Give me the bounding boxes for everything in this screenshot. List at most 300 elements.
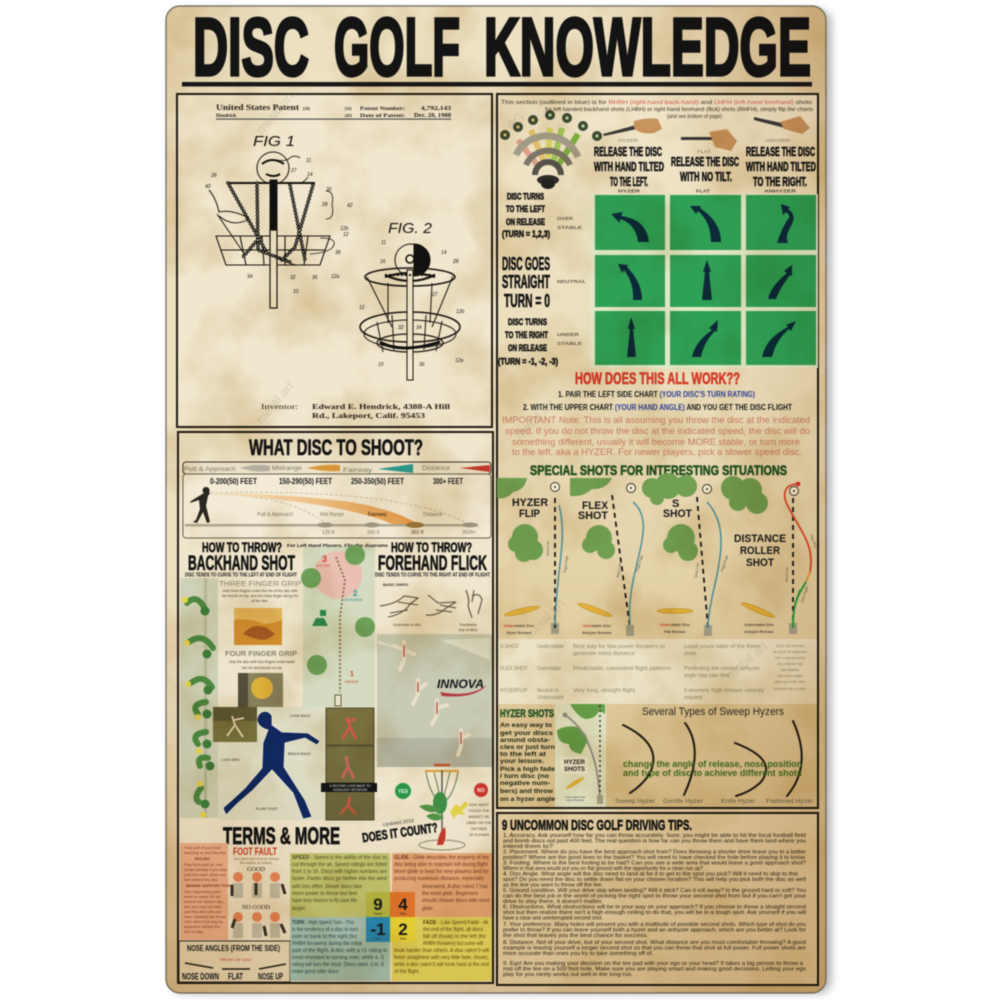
path labels: Shot Line xyxy=(785,567,789,582)
flight distance chart: Mid Range xyxy=(320,512,344,518)
flat release text: FLAT xyxy=(697,149,711,154)
shot comparison table: S-SHOT xyxy=(500,644,519,650)
glide card: GLIDE - Glide describes the property of the xyxy=(394,855,489,861)
dashed note: OUTSIDE xyxy=(471,827,488,831)
dashed note: BASKET OR xyxy=(469,815,490,819)
path labels: Flight Path xyxy=(563,556,569,573)
figure 1 basket: 40 xyxy=(205,184,211,190)
captions: Anhyzer Release xyxy=(744,630,774,634)
important note: IMPORTANT Note: This is all assuming you throw the disc at the indicated xyxy=(502,415,810,426)
flight number boxes: Turn xyxy=(375,936,381,940)
glide card: the most glide. Beginners xyxy=(422,891,478,897)
icon: turn gauge xyxy=(500,110,602,189)
shot comparison table: Overstable xyxy=(537,666,561,672)
foot fault rules: NO GOOD xyxy=(242,905,271,911)
left turn labels: DISC TURNS xyxy=(508,317,547,328)
heading: backhand shot: DISC TENDS TO CURVE TO THE LEFT AT END OF FLIGHT xyxy=(185,572,297,578)
shot names: ROLLER xyxy=(740,545,780,557)
tips list: 6. Obstructions. What obstructions will be in your way on your approach? If you choose to throw a straight second xyxy=(503,904,806,910)
tips list: mid off the tee on a 500 foot hole. Make sure you are playing smart and making good decisions. Letting your ego xyxy=(503,966,806,972)
foot fault rules: RULING xyxy=(195,856,210,861)
figure 2 basket: 32 xyxy=(398,325,404,331)
shot comparison table: Perfecting the correct anhyzer xyxy=(684,666,760,672)
shot names: SHOT xyxy=(578,510,608,522)
forehand grip drawings: Thumbside xyxy=(459,623,477,627)
figure 1 basket: 28 xyxy=(321,202,328,208)
hyzer shots section: HYZER SHOTS xyxy=(500,708,554,720)
flight distance chart: Distance xyxy=(423,512,443,518)
speed card: have less chance to fly past the xyxy=(292,898,357,904)
dashed note: OF A CHAIN xyxy=(469,833,489,837)
swing photos: A SECOND LOOK BACK TO xyxy=(330,784,371,788)
flight distance chart: 250-350(50) FEET xyxy=(351,476,405,486)
figure 2 basket: 34 xyxy=(416,325,422,331)
hyzer map xyxy=(555,704,606,807)
figure 2 basket: 16 xyxy=(380,259,386,265)
shot comparison table: Least yours faller of the three xyxy=(684,644,760,650)
glide card: should choose discs with more xyxy=(422,898,490,904)
speed card: faster. Faster discs go farther into the wind xyxy=(292,876,387,882)
foot fault rules: anywhere behind the xyxy=(184,924,220,929)
path labels xyxy=(546,534,818,603)
shot comparison table: are good for beginners xyxy=(773,650,807,654)
heading: does it count: DOES IT COUNT? xyxy=(361,820,439,845)
inventor text: Rd., Lakeport, Calif. 95453 xyxy=(312,412,426,420)
left turn labels: UNDER xyxy=(557,332,580,338)
left turn labels: ON RELEASE xyxy=(508,343,547,354)
tips list: as the line you want to throw off the tee. xyxy=(503,882,603,888)
figure 1 basket: 32 xyxy=(290,275,296,281)
flat release text xyxy=(671,149,739,184)
figure 1 basket xyxy=(205,133,353,308)
shot names: FLEX xyxy=(582,500,609,512)
flight distance chart: 350 ft xyxy=(411,530,424,536)
figure 2 basket: 14 xyxy=(441,250,447,256)
note: left hand players: For Left Hand Players, Flip the diagrams xyxy=(287,543,388,549)
turn card: is the tendency of a disc to turn xyxy=(292,927,358,933)
tips list: 2. Placement. Where do you have the best approach shot from? Does throwing a shorter drive leave you in a better xyxy=(503,850,806,856)
how does this all work: HOW DOES THIS ALL WORK?? xyxy=(575,369,740,388)
left turn labels: TURN = 0 xyxy=(504,291,550,311)
how does this all work: 1. PAIR THE LEFT SIDE CHART (YOUR DISC'S TURN RATING) xyxy=(558,390,755,399)
flight distance chart: 350ft+ xyxy=(462,530,476,536)
foot fault rules: Your other foot may be xyxy=(184,919,223,924)
heading: backhand shot: HOW TO THROW? xyxy=(202,539,282,555)
throwing silhouette xyxy=(213,707,326,820)
figure 2 basket: 11 xyxy=(381,240,386,246)
tips list: example is leaving yourself a longer second shot so that you can throw that shot at full power. Full power shots are xyxy=(503,946,806,952)
throwing silhouette: LOCK HIPS xyxy=(221,758,240,762)
fade card: the end of the flight, all discs xyxy=(423,927,483,933)
foot fault rules: line of play. xyxy=(184,929,203,934)
turn card: RHBH throwers) during the initial xyxy=(292,941,362,947)
grip guide: of the disc. xyxy=(251,599,269,603)
watermark text: metal art xyxy=(522,595,568,642)
captions: Overstable Disc xyxy=(583,624,611,628)
flight distance chart: Putt & Approach xyxy=(257,512,293,518)
foot fault rules: FOOT FAULT xyxy=(233,846,277,858)
figure 2 basket: 10 xyxy=(378,362,384,368)
left turn labels: STABLE xyxy=(557,341,583,347)
nose angles: FRONT OF DISC xyxy=(220,957,252,962)
path labels: Flight Path xyxy=(635,555,644,572)
sign background xyxy=(166,6,832,994)
patent header: Date of Patent: xyxy=(360,113,405,119)
shot names: HYZER xyxy=(512,497,548,509)
sweep hyzer types: Flattened Hyzer xyxy=(766,798,814,805)
figure 1 basket: 30 xyxy=(326,187,332,193)
sweep hyzer types: Knife Hyzer xyxy=(721,798,756,805)
shot comparison table: Predictable, consistent flight patterns xyxy=(573,666,672,672)
foot fault rules: *Any part of your foot xyxy=(184,845,221,850)
hyzer release text: TO THE LEFT. xyxy=(610,174,648,189)
flight number boxes: 2 xyxy=(398,920,408,939)
course map: PUTTER xyxy=(316,564,330,568)
important note xyxy=(502,415,810,458)
shot comparison table: FLEX SHOT xyxy=(500,666,528,672)
flight distance chart xyxy=(183,474,491,538)
tips list: 8. Distance. Not of your drive, but of your second shot. What distance are you most comfortable throwing? A good xyxy=(503,940,806,946)
tips list: 3. Footing. Where is the best footing to be had? Can you see a wide area that would leave a good approach shot? xyxy=(503,860,806,866)
hyzer map: HYZER xyxy=(564,759,585,766)
shot comparison table: disc stability xyxy=(781,668,799,672)
grip guide: FOUR FINGER GRIP xyxy=(225,649,297,658)
left turn labels: STABLE xyxy=(557,225,583,231)
flight paths xyxy=(555,502,721,628)
throwing silhouette: PLANT FOOT xyxy=(256,807,279,811)
dashed note: DISC MUST xyxy=(469,803,490,807)
hyzer release text: HYZER xyxy=(618,138,639,143)
left turn labels: NEUTRAL xyxy=(557,279,586,285)
panel: hand angle chart xyxy=(497,94,818,808)
speed card: more power to throw but feel xyxy=(292,891,357,897)
anhyzer release text xyxy=(746,138,816,189)
captions: Hyzer Release xyxy=(506,631,532,635)
how does this all work xyxy=(523,369,792,412)
watermark text: metal art xyxy=(253,378,297,427)
important note: something different, usually it will become MORE stable, or turn more xyxy=(512,437,800,448)
flight number boxes: -1 xyxy=(370,920,386,939)
intro note: (and see bottom of page) xyxy=(667,114,722,120)
left turn labels: DISC TURNS xyxy=(507,192,544,202)
grip guide: THREE FINGER GRIP xyxy=(219,579,301,588)
tips list: have a clear and uninterrupted second shot. xyxy=(503,916,603,922)
throwing silhouette: REACH BACK xyxy=(288,752,311,756)
inventor text: Edward E. Hendrick, 4388-A Hill xyxy=(312,403,450,411)
figure 1 basket: 11 xyxy=(306,158,311,164)
icon: no: NO xyxy=(477,788,485,794)
tips list xyxy=(503,833,807,978)
glide card: disc being able to maintain loft during flight. xyxy=(394,862,489,868)
patent header: United States Patent xyxy=(216,102,299,112)
course map: 1 xyxy=(350,671,354,678)
foot fault rules: BEHIND SUPPORT POINT xyxy=(186,883,234,888)
sweep hyzer types: and type of disc to achieve different shots xyxy=(623,768,802,778)
hyzer release text: WITH HAND TILTED xyxy=(594,159,664,174)
inventor text xyxy=(261,403,450,420)
flight number boxes xyxy=(366,892,415,942)
hyzer map: SHOTS xyxy=(564,766,586,773)
captions: Understable Disc xyxy=(660,623,690,627)
hyzer map: Hyzer Release xyxy=(566,798,585,802)
left turn labels: OVER xyxy=(557,216,574,222)
patent header: Patent Number: xyxy=(360,106,405,112)
fade card: FADE - Low Speed Fade - At xyxy=(423,920,489,926)
heading: backhand shot: BACKHAND SHOT xyxy=(188,552,295,575)
innova logo: INNOVA xyxy=(437,677,484,691)
shot comparison table: Understable xyxy=(537,644,564,650)
fade card: finish straightest with very little fade, (hook), xyxy=(394,955,489,961)
tips list: 4. Disc Angle. What angle will the disc need to land at for it to get to the spot you pick? Will it need to skip to this xyxy=(503,872,798,878)
course map: 3 xyxy=(322,554,327,564)
left turn labels: STRAIGHT xyxy=(502,272,550,292)
watermark text: metal art xyxy=(722,638,771,682)
tips list: 7. Your preference. Many holes will present you with a multitude of possible second shots. Which type of shot do you xyxy=(503,922,806,928)
shot comparison table xyxy=(498,639,817,704)
left turn labels: (TURN = 1,2,3) xyxy=(502,229,550,240)
hyzer shots section xyxy=(500,704,814,807)
sweep hyzer types: Gentle Hyzer xyxy=(663,798,704,805)
captions: Flat Release xyxy=(664,630,686,634)
turn card: part of the flight. A disc with a +1 rating is xyxy=(292,948,388,954)
hyzer shots section: Pick a high fade xyxy=(500,766,555,773)
glide card: downwind. A disc rated 7 has xyxy=(422,884,488,890)
foot fault rules: have released the throw. xyxy=(184,914,226,919)
figure 1 basket: 10 xyxy=(293,289,299,295)
path labels: Flight Path xyxy=(720,555,729,572)
heading: does it count xyxy=(361,815,439,845)
fade card xyxy=(392,917,492,981)
captions xyxy=(504,623,774,635)
glide card: glide. xyxy=(422,906,434,912)
anhyzer release text: WITH HAND TILTED xyxy=(746,159,816,174)
foot fault rules: Play from your lie; one xyxy=(184,862,223,867)
throwing silhouette: LOOK BACK xyxy=(290,714,311,718)
heading: forehand flick: HOW TO THROW? xyxy=(391,539,472,555)
shot comparison table: Discs with flat tops xyxy=(776,644,804,648)
title: GOLF xyxy=(334,2,460,93)
sweep hyzer types: change the angle of release, nose position xyxy=(623,759,802,769)
left turn labels: DISC GOES xyxy=(502,254,550,274)
watermark text: metal art xyxy=(253,88,297,137)
shot names: DISTANCE xyxy=(734,533,786,545)
sweep hyzer types xyxy=(615,706,814,805)
panel: what disc to shoot xyxy=(178,432,493,983)
tips list: Where in that area would put you on flat ground with the opportunity for a clean run up? xyxy=(503,866,703,872)
fade card: while a disc rated 5 will hook hard at the end xyxy=(394,962,489,968)
fade card: hook harder than others. A disc rated 0 will xyxy=(394,948,489,954)
figure 1 basket: 34 xyxy=(247,274,253,280)
hyzer shots section: cles or just turn xyxy=(500,744,555,751)
how does this all work: 2. WITH THE UPPER CHART (YOUR HAND ANGLE) AND YOU GET THE DISC FLIGHT xyxy=(523,403,792,412)
heading: forehand flick xyxy=(375,539,490,578)
dashed note: HANG ON THE xyxy=(467,821,492,825)
turn card: make good roller discs. xyxy=(292,969,340,975)
column labels: HYZER xyxy=(618,188,641,194)
column labels: ANHYZER xyxy=(764,188,797,194)
shot comparison table: and lower weight xyxy=(777,674,803,678)
forehand grip drawings xyxy=(380,583,482,632)
patent header: [19] xyxy=(303,106,310,111)
tips list: position? Where are the good lines to the basket? You will need to have checked the hole before playing it to know. xyxy=(503,855,807,861)
foot fault rules: touching or over the line xyxy=(184,850,226,855)
disc legend: Fairway xyxy=(343,467,373,474)
turn card: over or bank to the right (for xyxy=(292,934,357,940)
figure 1 basket: 12 xyxy=(343,232,349,238)
captions: Understable Disc xyxy=(504,624,534,628)
patent header: Dec. 20, 1988 xyxy=(414,113,451,119)
path labels: Shot Line xyxy=(694,563,700,578)
icon: yes: YES xyxy=(398,789,409,795)
flight number boxes: Glide xyxy=(400,912,407,916)
glide card: producing maximum distance, especially xyxy=(394,876,484,882)
patent header xyxy=(216,102,451,120)
heading: what disc to shoot: WHAT DISC TO SHOOT? xyxy=(249,435,423,460)
figure 1 basket: 38 xyxy=(335,250,341,256)
speed card: SPEED - Speed is the ability of the disc to xyxy=(292,855,387,861)
foot fault rules: must be within 30 cm xyxy=(184,894,221,899)
hyzer shots section: negative num- xyxy=(500,780,550,787)
forehand grip drawings: (top of disc) xyxy=(459,628,477,632)
path labels: Disc Roll xyxy=(809,534,818,549)
hyzer shots section: your leisure. xyxy=(500,758,544,765)
patent header: 4,792,143 xyxy=(421,106,451,112)
path labels: Disc Flight xyxy=(800,586,809,603)
figure 2 basket xyxy=(359,220,465,380)
shot comparison table: arm; look for high xyxy=(777,662,803,666)
figure 1 basket: 42 xyxy=(347,203,353,209)
hyzer shots section: on a hyzer angle xyxy=(500,796,555,803)
anhyzer release text: TO THE RIGHT. xyxy=(753,174,807,189)
grip guide xyxy=(218,578,303,708)
tips list: 9. Ego! Are you making your decision on the tee pad with your ego or your head? It takes a big person to throw a xyxy=(503,961,804,967)
turn card xyxy=(290,917,390,981)
figure 1 basket: FIG 1 xyxy=(253,133,295,150)
speed card: target. xyxy=(292,906,306,912)
left turn labels: TO THE RIGHT xyxy=(505,330,548,341)
watermark text: metal art xyxy=(512,395,558,442)
hyzer map: Understable Disc xyxy=(564,795,586,799)
figure 1 basket: 12a xyxy=(331,274,340,280)
tips list: shot but then realize there isn't a high enough ceiling to do that, you will be in a tough spot. Ask yourself if you will xyxy=(503,910,806,916)
flight number boxes: 4 xyxy=(398,895,408,914)
left turn labels: TO THE LEFT xyxy=(506,204,545,215)
sweep hyzer types: Sweep Hyzer xyxy=(615,798,656,805)
shot comparison table: HYZERFLIP xyxy=(500,688,528,694)
disc legend: Midrange xyxy=(272,465,302,472)
figure 2 basket: FIG. 2 xyxy=(388,220,433,237)
dashed note: TOUCH THE xyxy=(469,809,490,813)
important note: to the left, aka a HYZER. For newer players, pick a slower speed disc. xyxy=(512,447,802,458)
foot fault rules: behind the marker disc, xyxy=(184,899,224,904)
tips list: can do the best job in the world of picking the right spot to throw your second shot from but if you can't get your xyxy=(503,894,806,900)
patent header: [11] xyxy=(345,106,352,111)
inventor text: Inventor: xyxy=(261,403,298,411)
heading: forehand flick: FOREHAND FLICK xyxy=(378,552,487,575)
forehand photos xyxy=(377,634,492,767)
course map: MIDRANGE xyxy=(344,598,364,602)
shot comparison table: Neutral to xyxy=(537,688,559,694)
figure 1 basket: 12b xyxy=(340,226,349,232)
flight number boxes: 9 xyxy=(373,895,383,914)
glide card xyxy=(392,853,492,917)
foot fault rules: past the mark; keep one xyxy=(184,872,226,877)
tee pads xyxy=(551,623,797,636)
hyzer shots section: get your discs xyxy=(500,730,553,737)
figure 1 basket: 14 xyxy=(307,172,313,178)
figure 1 basket: 36 xyxy=(312,275,318,281)
heading: driving tips: 9 UNCOMMON DISC GOLF DRIVING TIPS. xyxy=(502,817,692,834)
flight distance chart: 150-290(50) FEET xyxy=(279,476,333,486)
tips list: intend them to? xyxy=(503,844,553,850)
shot names: SHOT xyxy=(746,557,774,569)
icon: hand flat xyxy=(681,129,737,151)
hyzer shots section: bers) and throw xyxy=(500,788,554,795)
patent header: Hendrick xyxy=(216,114,236,119)
figure 2 basket: 12b xyxy=(456,309,465,315)
intro note xyxy=(501,100,813,120)
shot names: S xyxy=(672,498,679,510)
shot comparison table: increase with practice xyxy=(774,687,806,691)
tips list: and bomb discs out past 400 feet. The real question is how far can you throw them and have them land where you xyxy=(503,838,806,844)
icon: hand anhyzer xyxy=(754,116,810,134)
important note: speed. If you do not throw the disc at the indicated speed, the disc will do xyxy=(505,426,810,437)
flight distance chart: 125 ft xyxy=(322,530,335,536)
icon: hand hyzer xyxy=(603,118,662,136)
aged paper texture overlay xyxy=(166,6,826,993)
hyzer release text xyxy=(594,138,664,189)
dashed note xyxy=(467,803,492,837)
trees xyxy=(497,473,768,562)
foot fault rules: stroke penalty if you step xyxy=(184,867,227,872)
targets xyxy=(550,482,798,496)
flight distance chart: 200 ft xyxy=(367,530,380,536)
figure 1 basket: 28 xyxy=(210,173,217,179)
hyzer shots section: An easy way to xyxy=(500,722,552,729)
hyzer shots section: to the left at xyxy=(500,751,547,758)
left strip: throwing sequence xyxy=(180,578,218,818)
captions: Anhyzer Release xyxy=(582,631,612,635)
roller path xyxy=(785,482,811,628)
grip guide: the rim and thumb on top xyxy=(242,666,282,670)
flight number boxes: Fade xyxy=(400,936,407,940)
fade card: fall off (hook) to the left (for xyxy=(423,934,486,940)
course map: DRIVER xyxy=(345,680,359,684)
intro note: for left handed backhand shots (LHBH) or right hand forehand (flick) shots (RHFH), simply flip the charts xyxy=(545,107,813,113)
disc legend xyxy=(183,462,491,474)
disc legend: Distance xyxy=(422,465,450,472)
intro note: This section (outlined in blue) is for RHBH (right-hand back-hand) and LHFH (left-hand forehand) shots xyxy=(501,100,812,106)
shot comparison table: with a slow throwing xyxy=(775,656,805,660)
grip guide: Grip the disc with four fingers underneath xyxy=(229,660,295,664)
flight distance chart: 0-200(50) FEET xyxy=(210,476,258,486)
figure 2 basket: 12 xyxy=(359,305,365,311)
shot lines xyxy=(555,495,793,628)
heading: forehand flick: DISC TENDS TO CURVE TO THE RIGHT AT END OF FLIGHT xyxy=(375,572,490,578)
nose angles: NOSE UP xyxy=(258,972,283,982)
panel: driving tips xyxy=(497,813,818,985)
heading: terms and more: TERMS & MORE xyxy=(223,823,340,850)
foot fault rules xyxy=(180,843,285,940)
disc legend: Putt & Approach xyxy=(184,466,236,473)
grip guide: the thumb on top, and the index finger along rim xyxy=(222,594,298,598)
path labels: Shot Line xyxy=(616,563,622,578)
shot comparison table: shots xyxy=(684,651,696,657)
shot names: FLIP xyxy=(519,508,540,520)
forehand grip drawings: Underside of disc xyxy=(393,623,421,627)
fade card: RHBH throwers) but some will xyxy=(423,941,483,947)
left turn labels xyxy=(498,192,586,368)
